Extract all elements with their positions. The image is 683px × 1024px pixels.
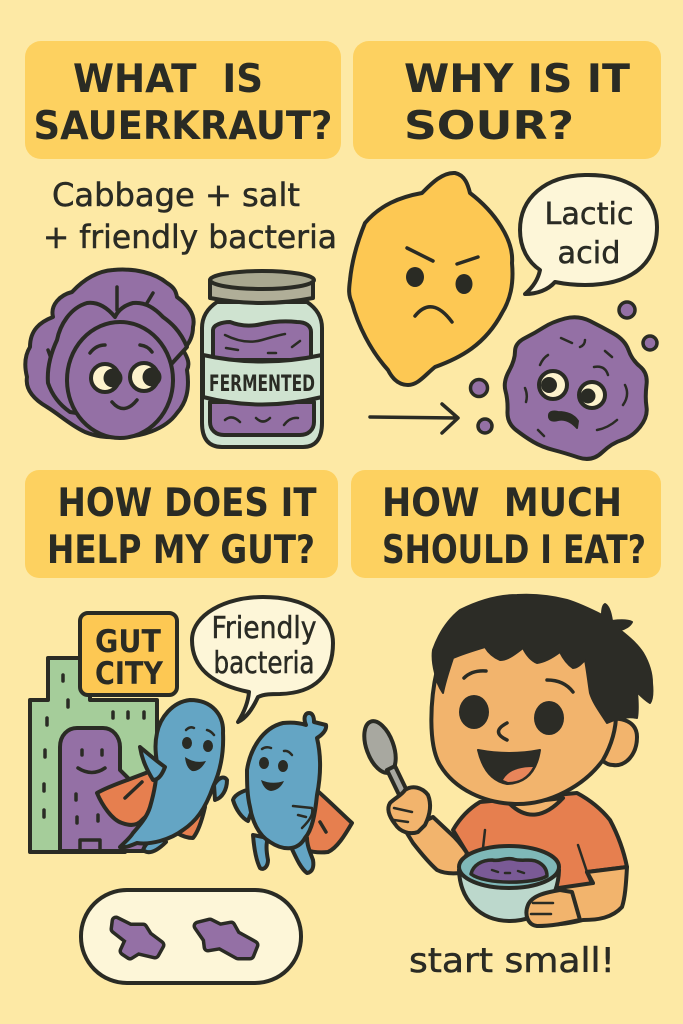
- text: cabbage + salt + friendly bacteria: Cabbage + salt: [52, 176, 300, 214]
- text: cabbage + salt + friendly bacteria: [43, 176, 337, 256]
- icon: angry lemon: [349, 173, 513, 385]
- icon: boy eating with spoon: [358, 595, 652, 926]
- panel: what is sauerkraut heading: SAUERKRAUT?: [34, 104, 332, 149]
- hair: [433, 595, 652, 723]
- sign: gut city: GUT: [95, 624, 161, 660]
- mouth: [478, 750, 540, 784]
- speech bubble: friendly bacteria: [192, 597, 333, 722]
- icon: fermented jar: FERMENTED: [209, 372, 315, 397]
- shirt: [453, 793, 627, 895]
- icon: purple cabbage with face: [25, 270, 194, 438]
- bubbles: small purple dots: [470, 302, 657, 433]
- hand: [388, 787, 430, 833]
- panel: how does it help my gut heading: HOW DOES IT: [58, 481, 317, 526]
- right arm: [527, 867, 627, 924]
- holding fingers: [526, 890, 580, 926]
- eyes: [459, 695, 489, 729]
- icon: blue superhero bacterium right: [233, 713, 352, 873]
- speech bubble: friendly bacteria: Friendly: [212, 611, 316, 646]
- panel: how much should i eat heading: HOW MUCH: [382, 481, 622, 526]
- panel: how much should i eat heading: [351, 470, 661, 578]
- speech bubble: lactic acid: Lactic: [544, 197, 634, 232]
- plate with kraut portions: [81, 890, 301, 983]
- speech bubble: friendly bacteria: bacteria: [214, 646, 314, 681]
- panel: why is it sour heading: SOUR?: [404, 104, 574, 149]
- spoon: [358, 717, 424, 832]
- head: [431, 640, 616, 804]
- left arm: [405, 817, 467, 873]
- panel: what is sauerkraut heading: [25, 41, 341, 159]
- panel: how does it help my gut heading: HELP MY GUT?: [47, 528, 315, 573]
- icon: blue superhero bacterium left: [97, 700, 227, 852]
- text: start small: start small!: [409, 941, 615, 981]
- speech bubble: lactic acid: acid: [558, 236, 620, 271]
- bowl: [459, 870, 559, 921]
- panel: why is it sour heading: [353, 41, 661, 159]
- speech bubble: lactic acid: [520, 175, 657, 294]
- arrow: [370, 404, 458, 433]
- sign: gut city: CITY: [95, 656, 163, 692]
- panel: what is sauerkraut heading: WHAT IS: [73, 57, 263, 102]
- sign: gut city: [80, 613, 177, 695]
- text: cabbage + salt + friendly bacteria: + friendly bacteria: [43, 218, 337, 256]
- icon: fermented jar: [202, 271, 322, 447]
- icon: sad purple kraut character: [505, 317, 647, 459]
- icon: gut city buildings: [30, 658, 157, 852]
- neck: [510, 798, 563, 815]
- panel: why is it sour heading: WHY IS IT: [404, 57, 630, 102]
- ear: [602, 719, 637, 765]
- panel: how does it help my gut heading: [25, 470, 338, 578]
